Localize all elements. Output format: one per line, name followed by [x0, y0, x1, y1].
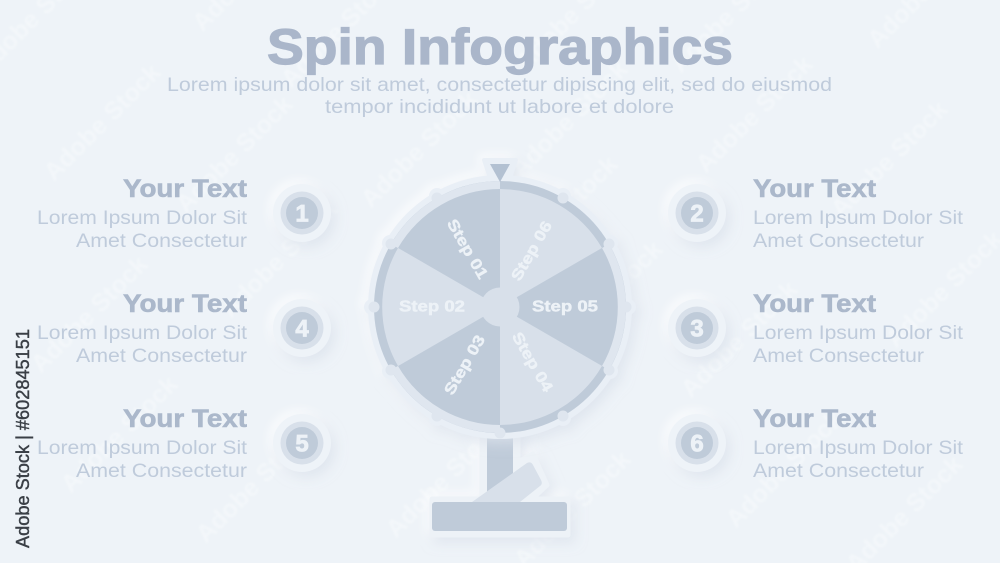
sector: step 05: Step 05 — [532, 298, 598, 316]
text block: left 1 — [37, 175, 248, 252]
sector: step 02 — [382, 248, 500, 366]
number badge 4 — [273, 299, 331, 357]
text: Adobe Stock — [825, 95, 953, 223]
text block: left 5: Lorem Ipsum Dolor Sit — [37, 437, 248, 459]
number badge 2: 2 — [690, 200, 704, 228]
text block: right 2: Your Text — [753, 175, 877, 203]
spinning wheel stand — [432, 425, 568, 535]
number badge 1 — [273, 184, 331, 242]
text block: left 5: Your Text — [123, 405, 248, 433]
text: Adobe Stock — [720, 405, 848, 533]
text block: left 4: Your Text — [123, 290, 248, 318]
number badge 6: 6 — [690, 430, 704, 458]
wheel hub — [480, 288, 520, 326]
text block: right 3 — [753, 290, 964, 367]
text block: right 2: Amet Consectetur — [753, 230, 925, 252]
number badge 5 — [273, 414, 331, 472]
ring knobs — [368, 192, 632, 438]
text block: right 6: Amet Consectetur — [753, 460, 925, 482]
subtitle — [167, 74, 832, 118]
number badge 3: 3 — [690, 316, 704, 342]
text: Adobe Stock — [540, 235, 668, 363]
text block: left 1: Your Text — [123, 175, 248, 203]
outer ring — [374, 181, 626, 433]
sector: step 06: Step 06 — [508, 218, 556, 284]
sector: step 05 — [500, 248, 618, 366]
text: Adobe Stock — [690, 50, 818, 178]
text block: left 4: Amet Consectetur — [76, 345, 248, 367]
text block: right 3: Amet Consectetur — [753, 345, 925, 367]
text: Adobe Stock — [380, 415, 508, 543]
text block: right 6 — [753, 405, 964, 482]
text: Adobe Stock — [55, 370, 183, 498]
text: Adobe Stock — [170, 90, 298, 218]
text block: right 6: Lorem Ipsum Dolor Sit — [753, 437, 964, 459]
text: Adobe Stock — [25, 250, 153, 378]
number badge 2 — [668, 184, 726, 242]
number badge 1: 1 — [295, 200, 309, 228]
text: Adobe Stock — [215, 195, 343, 323]
sector: step 01: Step 01 — [443, 216, 491, 282]
text block: right 3: Lorem Ipsum Dolor Sit — [753, 322, 964, 344]
sector: step 04: Step 04 — [508, 329, 556, 395]
wheel — [364, 160, 636, 439]
pointer — [490, 164, 510, 182]
sector: step 03 — [398, 307, 500, 425]
text block: right 3: Your Text — [753, 290, 877, 318]
text block: left 1: Lorem Ipsum Dolor Sit — [37, 207, 248, 229]
title: Spin Infographics — [267, 19, 733, 75]
subtitle: tempor incididunt ut labore et dolore — [325, 96, 674, 118]
text: Adobe Stock — [190, 420, 318, 548]
text block: left 5 — [37, 405, 248, 482]
text block: left 4 — [37, 290, 248, 367]
subtitle: Lorem ipsum dolor sit amet, consectetur dipiscing elit, sed do eiusmod — [167, 74, 832, 96]
sector: step 04 — [500, 307, 602, 425]
text block: right 2: Lorem Ipsum Dolor Sit — [753, 207, 964, 229]
number badge 6 — [668, 414, 726, 472]
stand post — [487, 425, 513, 505]
text: Adobe Stock — [495, 150, 623, 278]
stand strut — [472, 462, 542, 502]
stand base — [432, 502, 567, 531]
text block: right 6: Your Text — [753, 405, 877, 433]
watermark id strip: Adobe Stock | #602845151 — [12, 329, 33, 548]
text block: left 4: Lorem Ipsum Dolor Sit — [37, 322, 248, 344]
text: Adobe Stock — [355, 85, 483, 213]
text: Adobe Stock — [675, 275, 803, 403]
number badge 4: 4 — [295, 316, 309, 342]
text: Adobe Stock — [505, 55, 633, 183]
sector: step 02: Step 02 — [399, 298, 465, 316]
sector: step 03: Step 03 — [441, 332, 489, 398]
text block: left 5: Amet Consectetur — [76, 460, 248, 482]
text: Adobe Stock — [38, 58, 166, 186]
number badge 5: 5 — [295, 430, 309, 458]
sector: step 01 — [398, 189, 500, 307]
sector: step 06 — [500, 189, 602, 307]
text block: right 2 — [753, 175, 964, 252]
text block: left 1: Amet Consectetur — [76, 230, 248, 252]
number badge 3 — [668, 299, 726, 357]
